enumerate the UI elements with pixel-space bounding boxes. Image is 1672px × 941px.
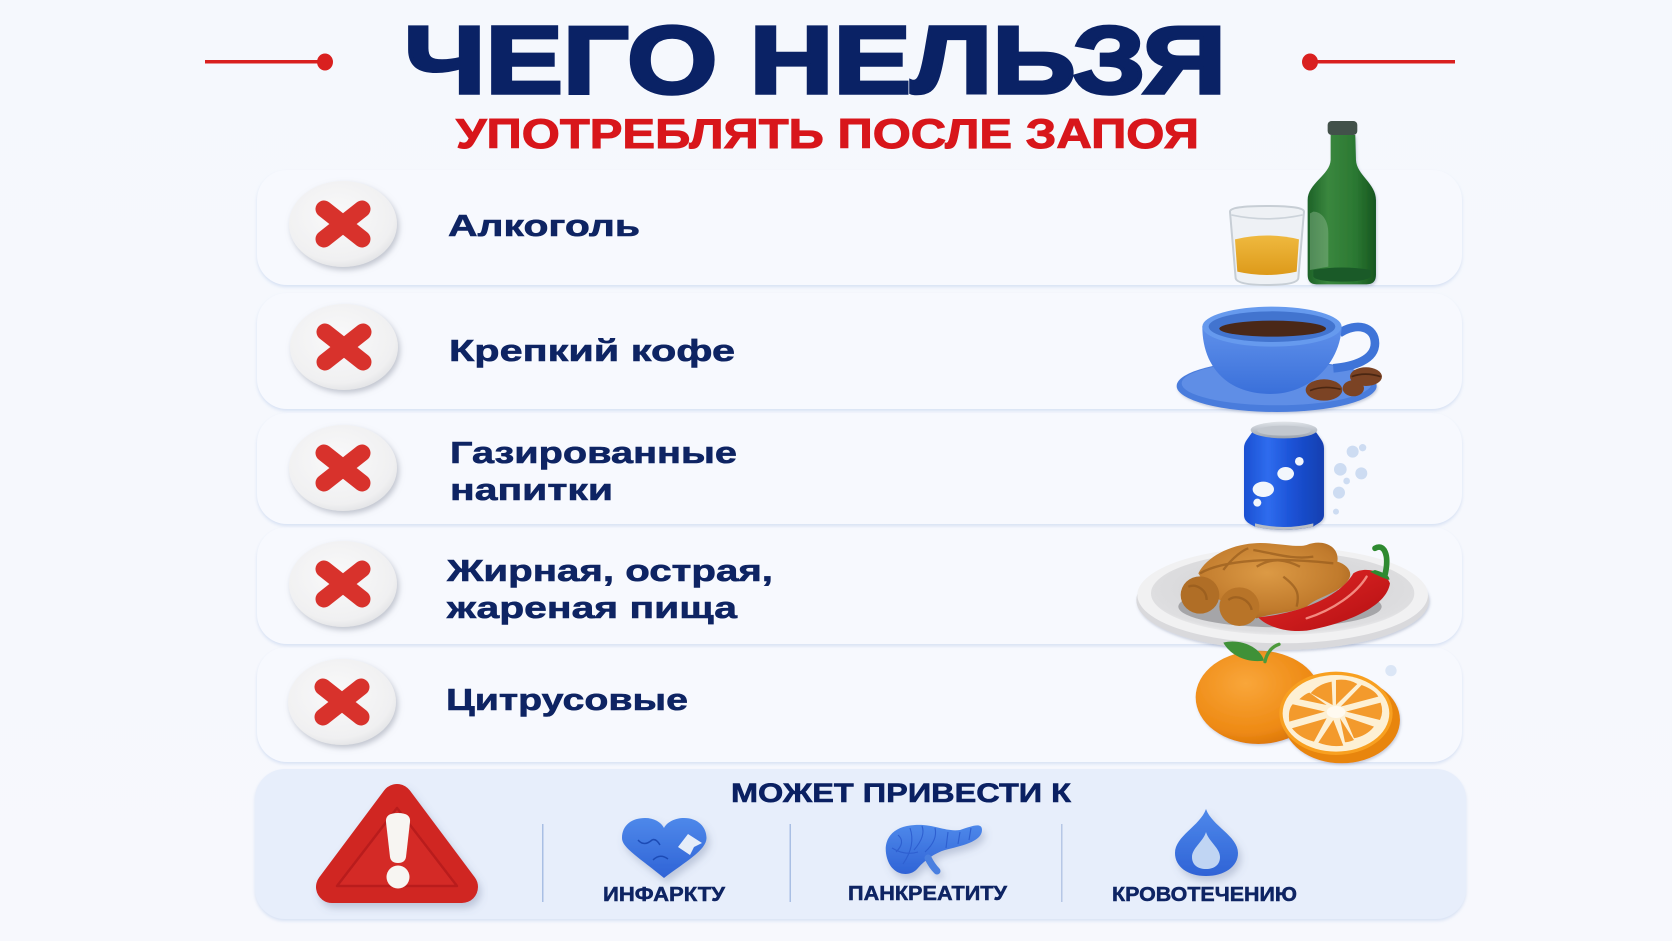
row: coffee xyxy=(257,293,1462,412)
panel heading: МОЖЕТ ПРИВЕСТИ К xyxy=(731,778,1072,808)
icon: warning triangle xyxy=(332,800,462,888)
icon: red cross button xyxy=(289,425,397,511)
row: soda xyxy=(257,413,1462,530)
icon: pancreas xyxy=(886,825,982,874)
subtitle: УПОТРЕБЛЯТЬ ПОСЛЕ ЗАПОЯ xyxy=(456,110,1199,157)
label: citrus: Цитрусовые xyxy=(446,682,688,717)
label: soda: Газированные xyxy=(450,435,737,470)
label: heart attack: ИНФАРКТУ xyxy=(603,884,726,906)
icon: blood drop xyxy=(1175,809,1238,876)
icon: red cross button xyxy=(289,541,397,627)
panel: consequences xyxy=(255,769,1466,919)
label: strong coffee: Крепкий кофе xyxy=(449,333,735,368)
icon: red cross button xyxy=(290,304,398,390)
row: alcohol xyxy=(257,121,1462,285)
row: fatty food xyxy=(257,527,1462,650)
icon: bottle and glass xyxy=(1230,121,1376,285)
decorative line: right xyxy=(1302,54,1455,70)
label: fatty food: Жирная, острая, xyxy=(446,553,773,588)
label: soda: напитки xyxy=(450,472,613,507)
icon: orange leaf xyxy=(1223,641,1279,662)
icon: plate with fried food and chili xyxy=(1136,543,1429,650)
decorative line: left xyxy=(205,54,333,70)
divider xyxy=(542,824,544,902)
label: fatty food xyxy=(446,553,773,625)
label: pancreatitis: ПАНКРЕАТИТУ xyxy=(848,883,1008,905)
label: bleeding: КРОВОТЕЧЕНИЮ xyxy=(1112,884,1297,906)
icon: soda can xyxy=(1244,422,1367,530)
icon: coffee cup xyxy=(1177,307,1382,412)
icon: oranges xyxy=(1196,651,1400,763)
icon: blue heart xyxy=(622,818,706,878)
divider xyxy=(1061,824,1062,902)
label: fatty food: жареная пища xyxy=(446,590,738,625)
label: soda xyxy=(450,435,737,507)
title: ЧЕГО НЕЛЬЗЯ xyxy=(404,7,1226,114)
row: citrus xyxy=(257,647,1462,763)
icon: red cross button xyxy=(289,181,397,267)
label: alcohol: Алкоголь xyxy=(448,208,640,243)
icon: red cross button xyxy=(288,659,396,745)
divider xyxy=(790,824,791,902)
